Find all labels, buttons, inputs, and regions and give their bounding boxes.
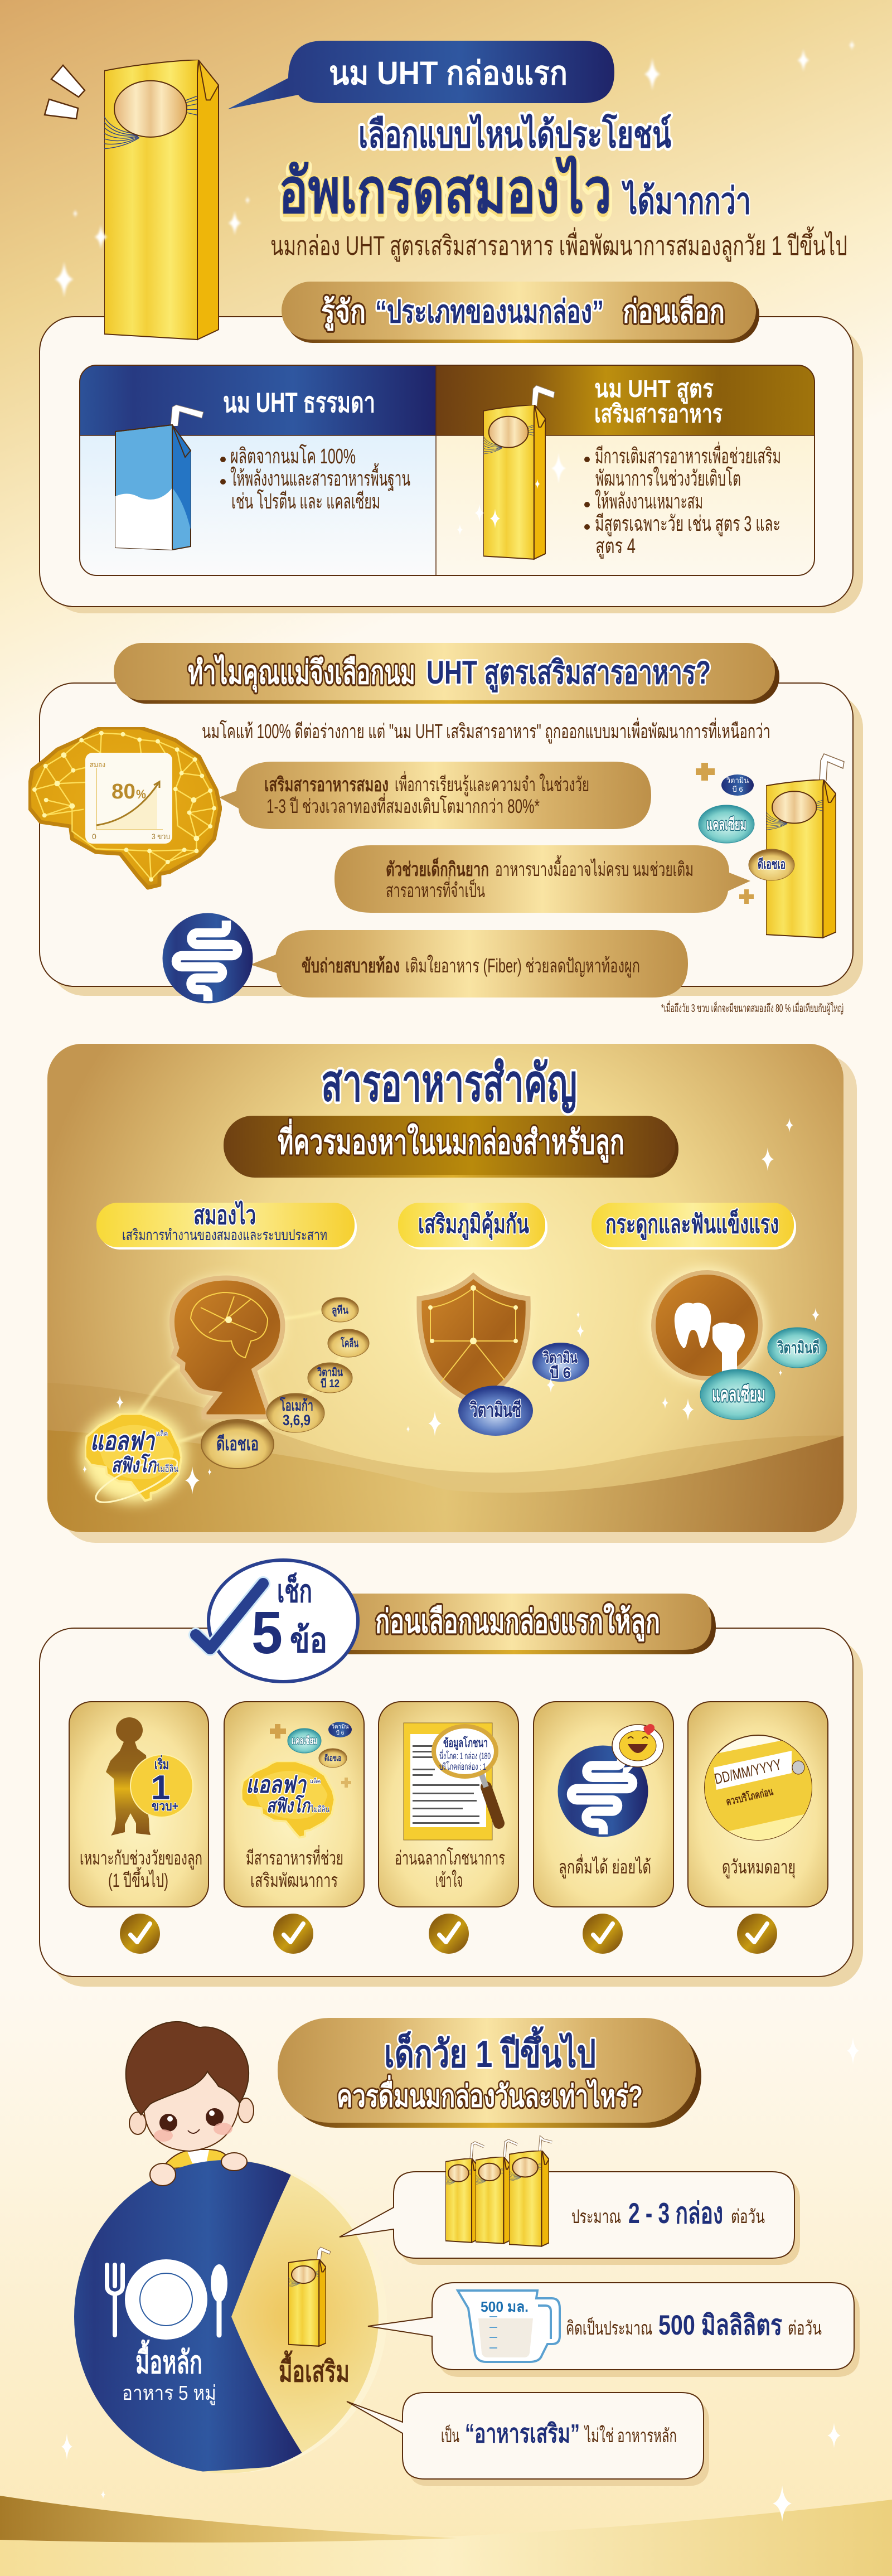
panel: why choose fortified <box>40 683 863 996</box>
column: regular UHT: ให้พลังงานและสารอาหารพื้นฐาน <box>230 463 410 491</box>
heading pill: how much per day: เด็กวัย 1 ปีขึ้นไป <box>384 2026 596 2075</box>
icon: nutrition label with magnifier: บริโภคต่อกล่อง : 1 <box>439 1761 486 1772</box>
callout: brain nutrients: 1-3 ปี ช่วงเวลาทองที่สมองเติบโตมากกว่า 80%* <box>266 793 540 817</box>
callout: picky eaters: อาหารบางมื้ออาจไม่ครบ นมช่วยเติม <box>495 855 694 880</box>
heading pill: what to look for <box>224 1116 678 1178</box>
callout: 2-3 boxes: 2 - 3 กล่อง <box>628 2197 723 2230</box>
icon: measuring cup: 500 มล. <box>481 2298 529 2315</box>
icon: child silhouette: เริ่ม <box>154 1755 169 1773</box>
icon: expiry date label: ควรบริโภคก่อน <box>725 1785 774 1808</box>
callout: 500 ml: คิดเป็นประมาณ <box>566 2317 652 2339</box>
icon: gold carton <box>457 385 566 559</box>
heading pill: how much per day <box>278 2018 701 2128</box>
column: fortified UHT <box>457 375 781 559</box>
title: ได้มากกว่า <box>622 180 751 221</box>
check marks row <box>120 1914 777 1954</box>
icon: three cartons <box>445 2138 552 2246</box>
icon: brain with growth chart <box>29 728 220 888</box>
callout: 2-3 boxes <box>340 2138 800 2265</box>
label pill: bones and teeth: กระดูกและฟันแข็งแรง <box>605 1208 779 1240</box>
column: fortified UHT: สูตร 4 <box>595 535 636 559</box>
icon: brain with nutrients <box>241 1722 352 1838</box>
icon: carton with nutrients: วิตามิน <box>726 776 749 785</box>
nutrient bubbles: โคลีน <box>340 1337 358 1350</box>
title: อัพเกรดสมองไว <box>279 159 612 229</box>
icon: happy gut <box>558 1724 663 1837</box>
column: regular UHT: ผลิตจากนมโค 100% <box>230 444 356 468</box>
icon: brain with nutrients: ไมอีลิน <box>310 1804 329 1814</box>
alpha-lac sphingomyelin brain: ไมอีลิน <box>156 1463 178 1474</box>
stars: key nutrients panel <box>762 1118 793 1171</box>
heading pill: how much per day: ควรดื่มนมกล่องวันละเท่าไหร่? <box>337 2075 643 2113</box>
heading pill: before choosing: ก่อนเลือกนมกล่องแรกให้ลูก <box>375 1602 660 1642</box>
icon: carton with nutrients <box>696 754 844 938</box>
column: fortified UHT: พัฒนาการในช่วงวัยเติบโต <box>595 466 741 491</box>
column: fortified UHT: ให้พลังงานเหมาะสม <box>595 490 703 514</box>
alpha-lac sphingomyelin brain: แอลฟา <box>90 1426 156 1455</box>
icon: plate and cutlery <box>107 2259 227 2340</box>
icon: expiry date label: DD/MM/YYYY <box>713 1756 783 1788</box>
illustration: teeth and bone: แคลเซียม <box>712 1383 765 1406</box>
check card 1: age: (1 ปีขึ้นไป) <box>108 1867 168 1891</box>
icon: brain with nutrients: สฟิงโก <box>266 1794 311 1817</box>
column: regular UHT: นม UHT ธรรมดา <box>223 387 375 418</box>
icon: intestine <box>163 913 253 1004</box>
icon: carton with nutrients: ดีเอชเอ <box>758 857 786 872</box>
icon: brain with growth chart: 80 <box>112 780 135 803</box>
icon: nutrition label with magnifier <box>404 1723 499 1840</box>
icon: carton with nutrients: บี 6 <box>732 785 743 793</box>
nutrient bubbles: ดีเอชเอ <box>216 1434 259 1455</box>
column: regular UHT <box>115 387 410 550</box>
icon: measuring cup <box>458 2291 560 2362</box>
nutrient bubbles: บี 12 <box>321 1377 340 1390</box>
heading pill: what to look for: ที่ควรมองหาในนมกล่องสำหรับลูก <box>278 1118 624 1163</box>
bottom gold band <box>0 2496 892 2576</box>
nutrient bubbles <box>201 1297 369 1469</box>
icon: brain with growth chart: 0 <box>92 832 96 841</box>
callout: brain nutrients: เสริมสารอาหารสมอง <box>264 774 389 796</box>
stars: hero <box>55 40 855 298</box>
callout: fiber <box>250 930 688 998</box>
chart: meal pie: อาหาร 5 หมู่ <box>122 2381 216 2405</box>
stars: bottom <box>61 2037 859 2521</box>
illustration: boy <box>126 2022 254 2169</box>
icon: brain with growth chart: % <box>136 787 146 801</box>
nutrient bubbles: 3,6,9 <box>283 1412 311 1429</box>
nutrient bubbles: ลูทีน <box>332 1304 348 1317</box>
illustration: head with brain nutrients <box>81 1278 369 1510</box>
column: fortified UHT: เสริมสารอาหาร <box>594 400 723 428</box>
heading pill: before choosing <box>312 1594 716 1654</box>
chart: meal pie <box>74 2160 379 2473</box>
callout: brain nutrients: เพื่อการเรียนรู้และความจำ ในช่วงวัย <box>395 771 589 796</box>
icon: carton with nutrients: แคลเซียม <box>706 816 746 833</box>
label pill: bones and teeth <box>592 1203 796 1250</box>
check card 2: nutrients: มีสารอาหารที่ช่วย <box>246 1845 343 1869</box>
column: fortified UHT: นม UHT สูตร <box>594 375 714 404</box>
badge: check 5 items <box>196 1560 358 1682</box>
panel: five checks <box>40 1628 863 1987</box>
callout: 2-3 boxes: ประมาณ <box>571 2206 621 2228</box>
label pill: brain: สมองไว <box>193 1200 256 1229</box>
label pill: immunity <box>398 1203 547 1250</box>
icon: child silhouette <box>106 1717 193 1836</box>
illustration: teeth and bone: วิตามินดี <box>777 1339 820 1357</box>
check card 1: age <box>69 1702 209 1907</box>
icon: brain with nutrients: แอลฟา <box>246 1771 307 1798</box>
check card 3: nutrition label <box>379 1702 518 1907</box>
illustration: shield <box>406 1276 589 1436</box>
chart: meal pie: มื้อหลัก <box>135 2340 202 2380</box>
illustration: shield: วิตามินซี <box>469 1398 521 1421</box>
nutrient bubbles: วิตามิน <box>317 1367 343 1379</box>
check card 3: nutrition label: เข้าใจ <box>435 1870 463 1891</box>
icon: brain with growth chart: 3 ขวบ <box>152 832 170 841</box>
callout: 500 ml: 500 มิลลิลิตร <box>658 2309 782 2341</box>
column: regular UHT: เช่น โปรตีน และ แคลเซียม <box>231 489 380 514</box>
boy hands <box>150 2153 247 2186</box>
callout: 500 ml: ต่อวัน <box>788 2318 822 2339</box>
callout: 500 ml <box>368 2283 860 2377</box>
icon: exclamation marks <box>45 65 85 119</box>
check card 5: expiry: ดูวันหมดอายุ <box>722 1857 796 1878</box>
speech bubble: hero: นม UHT กล่องแรก <box>329 55 568 91</box>
column: fortified UHT: มีการเติมสารอาหารเพื่อช่วยเสริม <box>595 442 781 468</box>
chart: meal pie: มื้อเสริม <box>279 2350 350 2388</box>
speech bubble: hero <box>227 41 614 109</box>
icon: expiry date label <box>702 1734 814 1840</box>
icon: brain with nutrients: ดีเอชเอ <box>324 1754 341 1763</box>
icon: nutrition label with magnifier: ข้อมูลโภชนา <box>443 1736 488 1751</box>
check card 1: age: เหมาะกับช่วงวัยของลูก <box>80 1848 202 1870</box>
column: fortified UHT: มีสูตรเฉพาะวัย เช่น สูตร 3 และ <box>595 512 780 536</box>
callout: brain nutrients <box>219 762 651 829</box>
callout: picky eaters: สารอาหารที่จำเป็น <box>386 877 485 902</box>
heading pill: why: ทำไมคุณแม่จึงเลือกนม <box>188 654 415 693</box>
callout: picky eaters: ตัวช่วยเด็กกินยาก <box>386 857 489 880</box>
label pill: brain <box>96 1200 357 1250</box>
heading pill: know carton types: ก่อนเลือก <box>623 294 725 329</box>
callout: fiber: เติมใยอาหาร (Fiber) ช่วยลดปัญหาท้องผูก <box>405 955 640 977</box>
icon: brain with growth chart: สมอง <box>90 761 105 769</box>
nutrient bubbles: โอเมก้า <box>279 1396 313 1414</box>
label pill: immunity: เสริมภูมิคุ้มกัน <box>418 1209 529 1240</box>
icon: child silhouette: ขวบ+ <box>152 1799 178 1813</box>
check card 2: nutrients: เสริมพัฒนาการ <box>250 1870 338 1891</box>
title: key nutrients: สารอาหารสำคัญ <box>321 1055 577 1113</box>
icon: brain with nutrients: แคลเซียม <box>292 1735 317 1747</box>
comparison table <box>80 365 815 575</box>
badge: check 5 items: เช็ก <box>277 1572 312 1609</box>
icon: brain with nutrients: แล็ค <box>310 1777 321 1785</box>
label pill: brain: เสริมการทำงานของสมองและระบบประสาท <box>122 1227 327 1243</box>
heading pill: know carton types <box>282 282 759 343</box>
check card 5: expiry <box>688 1702 828 1907</box>
icon: nutrition label with magnifier: นึ่งโภค: 1 กล่อง (180 <box>439 1749 491 1761</box>
callout: fiber: ขับถ่ายสบายท้อง <box>302 955 400 977</box>
illustration: shield: บี 6 <box>550 1364 571 1381</box>
alpha-lac sphingomyelin brain <box>81 1395 211 1510</box>
check card 4: digestible: ลูกดื่มได้ ย่อยได้ <box>559 1854 651 1878</box>
heading pill: know carton types: “ประเภทของนมกล่อง” <box>375 294 604 329</box>
callout: supplementary food: “อาหารเสริม” <box>465 2419 580 2448</box>
callout: 2-3 boxes: ต่อวัน <box>731 2206 765 2228</box>
title: เลือกแบบไหนได้ประโยชน์ <box>358 113 672 155</box>
heading pill: why <box>114 643 779 704</box>
alpha-lac sphingomyelin brain: แล็ค <box>156 1430 168 1437</box>
hero carton <box>104 60 219 340</box>
icon: carton in pie <box>288 2247 331 2346</box>
icon: blue carton <box>115 405 203 550</box>
heading pill: why: UHT สูตรเสริมสารอาหาร? <box>426 655 711 693</box>
callout: supplementary food <box>347 2393 709 2486</box>
alpha-lac sphingomyelin brain: สฟิงโก <box>112 1453 157 1476</box>
check card 2: nutrients <box>224 1702 364 1907</box>
title <box>279 113 751 229</box>
panel: key nutrients <box>47 1044 857 1543</box>
check card 3: nutrition label: อ่านฉลากโภชนาการ <box>395 1847 505 1869</box>
icon: brain with nutrients: วิตามิน <box>331 1724 349 1730</box>
icon: brain with nutrients: บี 6 <box>336 1730 345 1736</box>
title: อัพเกรดสมองไว <box>279 156 612 226</box>
icon: child silhouette: 1 <box>151 1769 170 1807</box>
callout: supplementary food: ไม่ใช่ อาหารหลัก <box>584 2425 677 2447</box>
badge: check 5 items: ข้อ <box>290 1621 327 1660</box>
illustration: teeth and bone <box>649 1268 827 1421</box>
illustration: shield: วิตามิน <box>542 1349 578 1366</box>
callout: picky eaters <box>334 845 750 913</box>
heading pill: know carton types: รู้จัก <box>321 294 366 331</box>
panel: type of milk card <box>40 317 863 613</box>
callout: supplementary food: เป็น <box>441 2424 459 2447</box>
check card 4: digestible <box>534 1702 673 1907</box>
badge: check 5 items: 5 <box>251 1599 283 1666</box>
